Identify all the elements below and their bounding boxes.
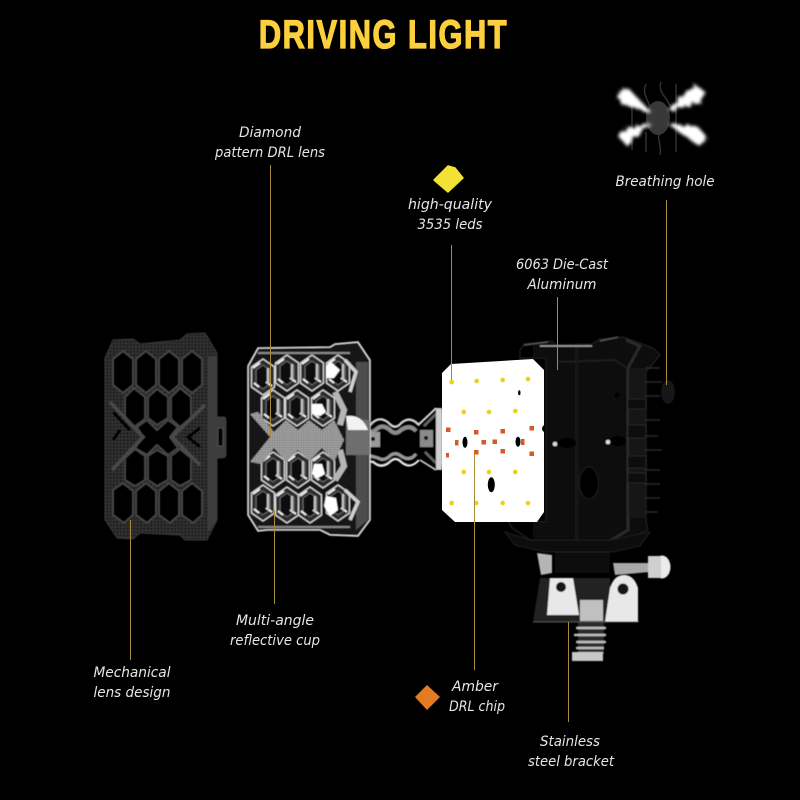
icon: breathing hole bbox=[617, 82, 708, 155]
label: aluminum: 6063 Die-Cast bbox=[516, 257, 609, 273]
label: mechanical lens bbox=[94, 665, 170, 701]
label: amber chip bbox=[449, 679, 505, 715]
label: reflective cup: Multi-angle bbox=[236, 613, 314, 629]
LED circuit board bbox=[442, 359, 544, 522]
label: reflective cup: reflective cup bbox=[230, 633, 320, 649]
label: mechanical lens: lens design bbox=[94, 685, 170, 701]
label: aluminum: Aluminum bbox=[527, 277, 596, 293]
label: LEDs bbox=[408, 197, 492, 233]
label: bracket bbox=[528, 734, 615, 770]
icon: amber chip bbox=[415, 685, 440, 710]
label: diamond lens: pattern DRL lens bbox=[214, 145, 325, 161]
label: reflective cup bbox=[230, 613, 320, 649]
mounting bracket bbox=[505, 532, 670, 661]
label: LEDs: high-quality bbox=[408, 197, 492, 213]
mechanical lens bbox=[105, 333, 226, 540]
label: breathing hole: Breathing hole bbox=[616, 174, 715, 190]
label: amber chip: DRL chip bbox=[449, 699, 505, 715]
label: aluminum bbox=[516, 257, 609, 293]
leader lines bbox=[130, 165, 666, 722]
diamond X lens bbox=[250, 412, 344, 464]
connector ribbons bbox=[358, 408, 449, 470]
label: bracket: Stainless bbox=[540, 734, 600, 750]
clear reflective lens bbox=[248, 342, 370, 536]
label: diamond lens bbox=[214, 125, 325, 161]
icon: LED chip bbox=[434, 166, 463, 192]
label: bracket: steel bracket bbox=[528, 754, 615, 770]
title: DRIVING LIGHT bbox=[259, 12, 508, 57]
label: LEDs: 3535 leds bbox=[418, 217, 483, 233]
label: diamond lens: Diamond bbox=[239, 125, 302, 141]
reflector cups bbox=[252, 355, 350, 523]
label: amber chip: Amber bbox=[451, 679, 499, 695]
aluminum housing bbox=[508, 337, 675, 547]
label: mechanical lens: Mechanical bbox=[94, 665, 170, 681]
